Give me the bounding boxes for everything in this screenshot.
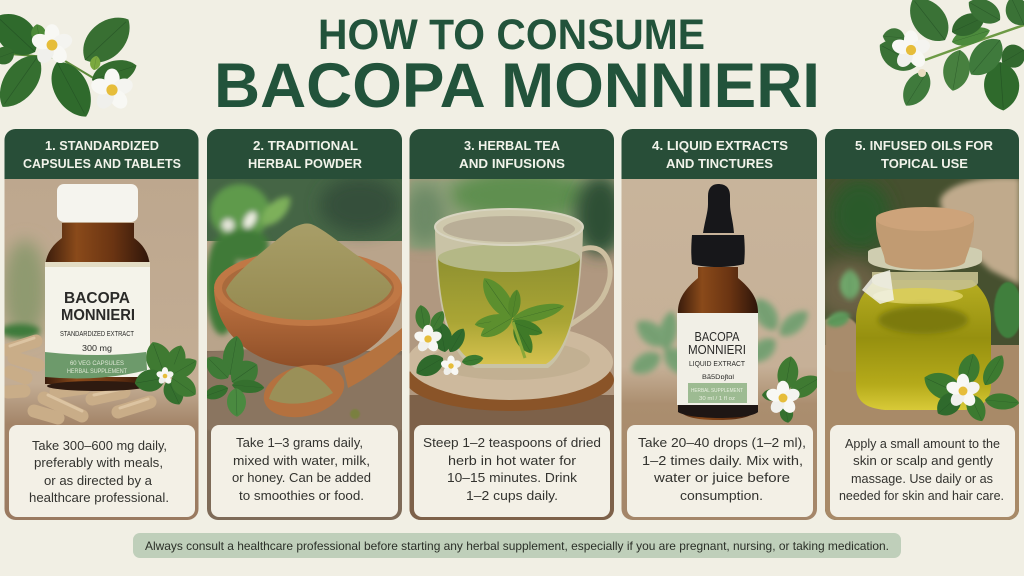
tea leaves [483,278,512,318]
text box 5: Apply a small amount to the [845,437,1000,451]
footer disclaimer [133,533,901,558]
saucer [410,371,614,411]
bottle label [677,313,758,405]
panel header 5: TOPICAL USE [881,156,968,171]
bottle cap [57,184,138,222]
text box 5 [830,425,1015,517]
bottle label: STANDARDIZED EXTRACT [60,331,135,338]
bottle label: 60 VEG CAPSULES [70,361,124,367]
panel header 2: HERBAL POWDER [248,156,363,171]
bottle label: MONNIERI [61,307,135,324]
text box 5: massage. Use daily or as [851,472,993,486]
cup handle [570,248,610,325]
text box 3: 10–15 minutes. Drink [447,471,578,485]
panel: herbal tea and infusions [405,129,625,520]
icon: leaves and flower [134,342,196,404]
title: HOW TO CONSUME [318,11,705,59]
panel header 2 [207,129,402,179]
decoration: top-left bacopa sprig [0,4,140,125]
text box 2: mixed with water, milk, [233,454,370,468]
flower and leaves [924,372,957,398]
panel header 2: 2. TRADITIONAL [253,138,358,153]
bottle label: 30 ml / 1 fl oz [699,396,735,402]
text box 1: preferably with meals, [34,456,163,470]
text box 4: consumption. [680,489,763,503]
photo: glass tea cup [405,170,625,520]
panel header 1: CAPSULES AND TABLETS [23,156,181,171]
text box 3: herb in hot water for [448,454,576,468]
text box 4: Take 20–40 drops (1–2 ml), [638,436,806,450]
title: BACOPA MONNIERI [214,51,820,121]
bottle label: 300 mg [82,343,112,353]
text box 4 [627,425,813,517]
jar [856,280,991,410]
cork [876,208,974,270]
text box 2: to smoothies or food. [239,489,364,503]
panel: standardized capsules and tablets [0,129,201,520]
text box 1: healthcare professional. [29,491,169,505]
photo: dropper bottle [621,179,824,520]
footer disclaimer: Always consult a healthcare professional before starting any herbal supplement, especially if you are pregnant, nursing, or taking medication. [145,539,889,553]
dropper [691,184,745,267]
panel header 5: 5. INFUSED OILS FOR [855,138,994,153]
text box 3: 1–2 cups daily. [466,489,558,503]
panel header 4: AND TINCTURES [666,156,773,171]
bottle label [45,262,150,378]
text box 2 [211,425,398,517]
bottle label: HERBAL SUPPLEMENT [67,369,127,375]
powder [226,223,392,320]
cup [435,228,583,368]
text box 5: skin or scalp and gently [853,454,994,468]
bowl [214,290,402,367]
flower and leaves [777,356,798,388]
panel header 3: 3. HERBAL TEA [464,138,561,153]
bottle label: HERBAL SUPPLEMENT [691,388,743,394]
panel header 3: AND INFUSIONS [459,156,565,171]
text box 1: Take 300–600 mg daily, [32,439,167,453]
bottle label: MONNIERI [688,343,746,357]
flowers and leaves [433,323,452,352]
panel header 3 [410,129,614,179]
bottle label: BACOPA [694,330,740,344]
text box 1 [9,425,195,517]
bottle label: BACOPA [64,290,130,307]
photo: capsule bottle [0,179,201,520]
bottle label: LIQUID EXTRACT [689,359,745,368]
panel header 4: 4. LIQUID EXTRACTS [652,138,788,153]
panel header 1: 1. STANDARDIZED [45,138,159,153]
photo: powder bowl [201,177,402,520]
text box 2: or honey. Can be added [232,471,371,485]
bottle body [678,267,758,420]
panel: liquid extracts and tinctures [621,129,824,520]
bottle label: Bã5Dɒʃtɑl [702,375,734,381]
leaves [222,336,244,375]
text box 2: Take 1–3 grams daily, [236,436,363,450]
panel: traditional herbal powder [201,129,402,520]
text box 4: 1–2 times daily. Mix with, [642,454,803,468]
panel header 4 [622,129,818,179]
text box 3 [414,425,610,517]
text box 5: needed for skin and hair care. [839,489,1004,503]
decoration: top-right bacopa sprig [873,0,1024,112]
spoon [343,328,402,388]
text box 3: Steep 1–2 teaspoons of dried [423,436,601,450]
panel header 1 [4,129,198,179]
panel: infused oils for topical use [815,129,1022,520]
title [214,11,820,121]
text box 1: or as directed by a [44,474,152,488]
photo: oil jar [815,177,1022,520]
panel header 5 [825,129,1019,179]
text box 4: water or juice before [653,471,790,485]
